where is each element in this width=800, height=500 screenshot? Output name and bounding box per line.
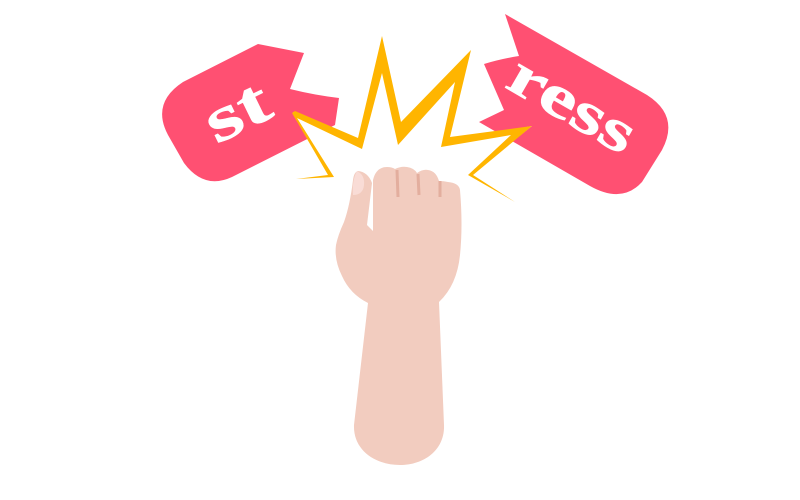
- right torn tag: ress: [479, 14, 668, 194]
- text: st: st: [191, 64, 283, 157]
- text: ress: ress: [497, 41, 649, 167]
- thumb nail: [353, 171, 364, 195]
- finger creases: [397, 170, 440, 197]
- burst: impact star: [292, 36, 532, 205]
- left torn tag: st: [162, 44, 339, 181]
- hand: raised fist and arm: [336, 167, 462, 465]
